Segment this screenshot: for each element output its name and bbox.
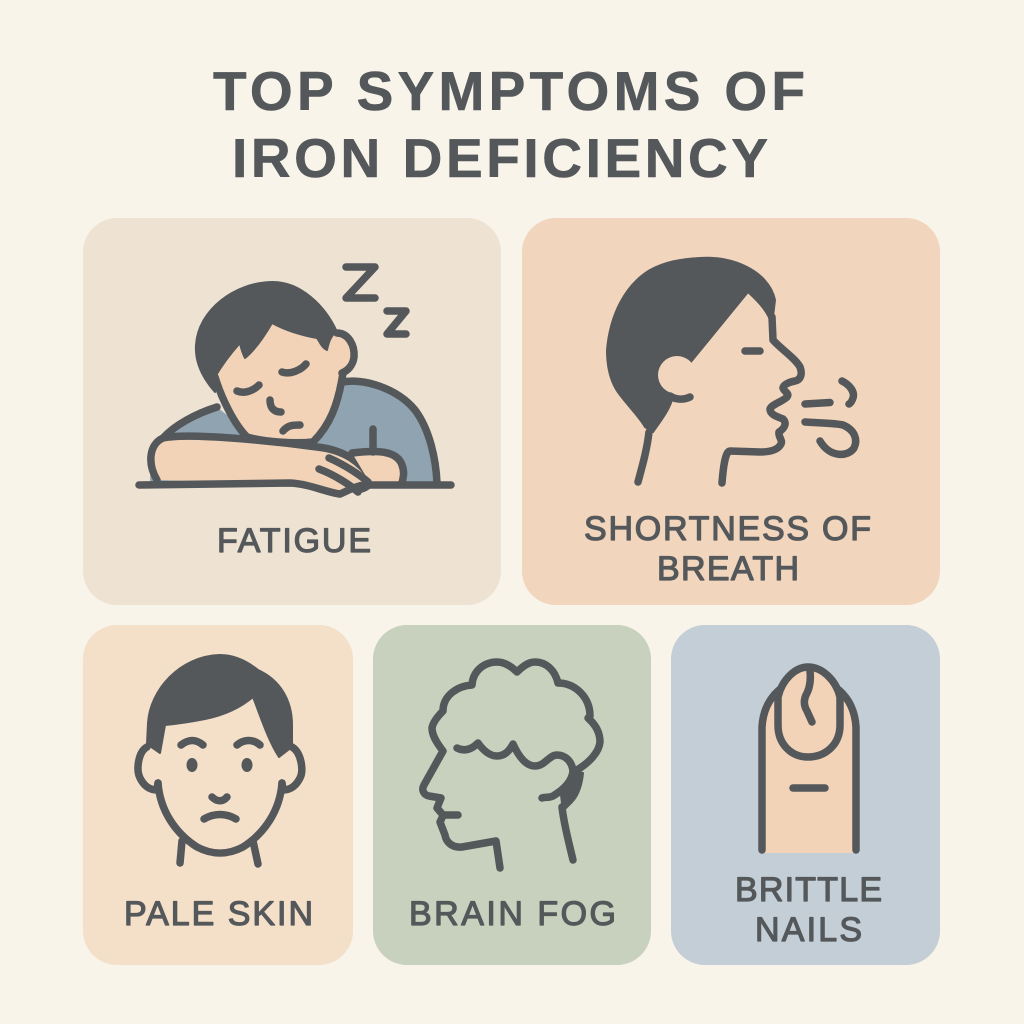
label: brittle nails [735,871,882,949]
label: pale skin: PALE SKIN [124,895,313,933]
label: shortness of breath: BREATH [657,550,799,588]
icon: head exhaling [607,258,856,483]
panel: shortness of breath [522,218,940,605]
label: brain fog: BRAIN FOG [409,895,616,933]
panel: fatigue [83,218,501,605]
panel: brittle nails [671,625,940,965]
title: IRON DEFICIENCY [232,127,768,189]
icon: head with cloud brain [423,662,600,868]
title: TOP SYMPTOMS OF [213,60,805,122]
title [213,60,805,189]
label: brittle nails: NAILS [755,911,862,949]
icon: finger with cracked nail [762,667,856,853]
label: brittle nails: BRITTLE [735,871,882,909]
panel: pale skin [83,625,353,965]
label: shortness of breath [584,510,871,588]
panel: brain fog [373,625,651,965]
icon: sleeping person [139,267,451,494]
icon: pale face [138,655,302,864]
label: fatigue: FATIGUE [217,522,371,560]
label: shortness of breath: SHORTNESS OF [584,510,871,548]
